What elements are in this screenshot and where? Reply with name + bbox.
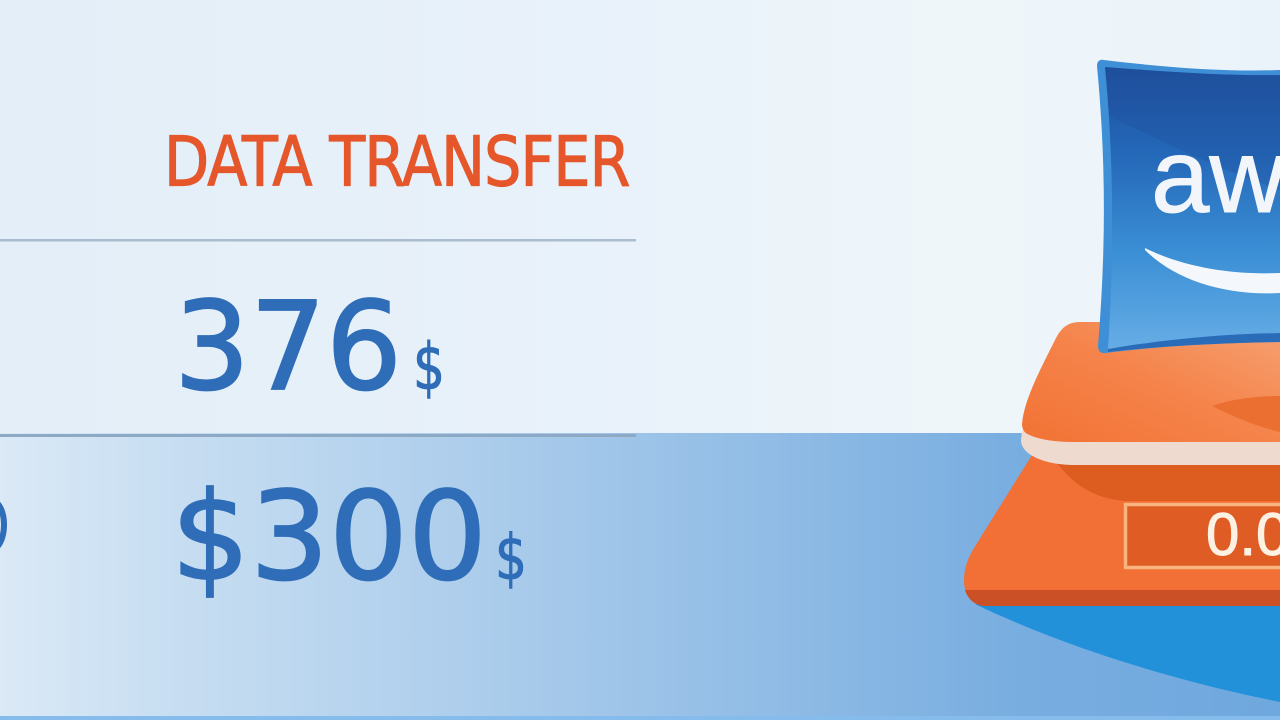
display <box>1126 501 1280 568</box>
value: 300 dollars: $ <box>495 521 527 594</box>
smile <box>1145 248 1280 293</box>
value: 300 dollars: $300 <box>171 466 487 608</box>
value: 376 dollars: 376 <box>174 276 402 418</box>
scale neck shadow <box>1056 462 1280 501</box>
heading: data transfer: DATA TRANSFER <box>164 123 630 203</box>
value: 376 dollars: $ <box>413 331 445 405</box>
scale shadow <box>975 604 1280 702</box>
value: 300 dollars <box>0 466 527 608</box>
scale base <box>964 455 1280 606</box>
illustration: AWS logo on a scale <box>964 60 1280 702</box>
scale base front lip <box>965 590 1280 606</box>
background: upper panel <box>0 0 1280 433</box>
background: lower band <box>0 433 1280 720</box>
scale platform <box>1022 322 1280 444</box>
platform white strip <box>1021 430 1280 465</box>
AWS tablet <box>1097 60 1280 353</box>
platform dimple <box>1212 396 1280 432</box>
